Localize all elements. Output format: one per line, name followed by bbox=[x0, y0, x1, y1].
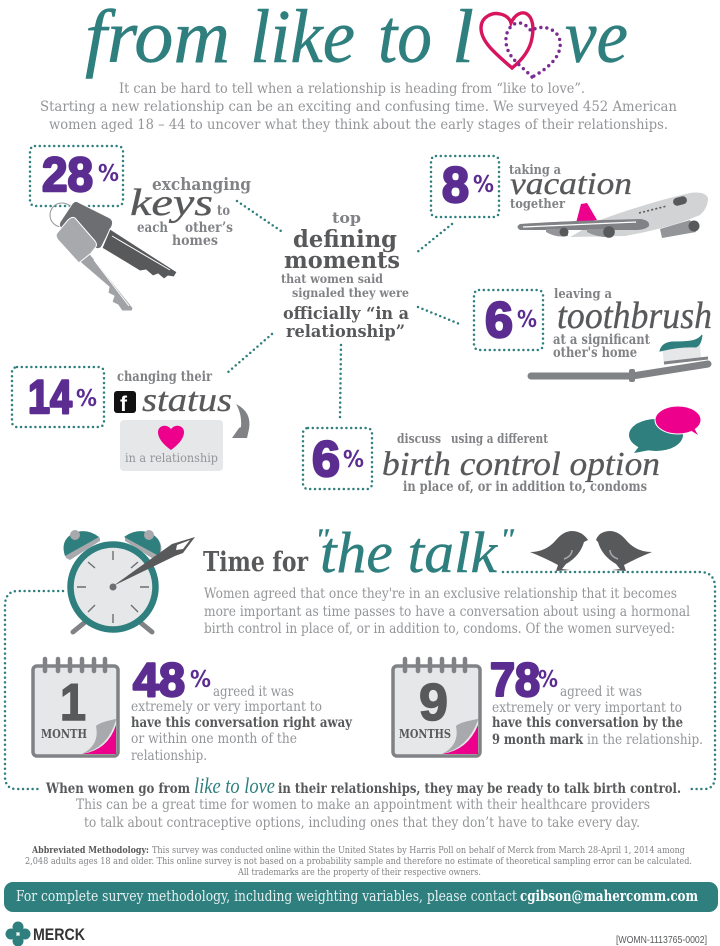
stat: 6 percent toothbrush: at a significant bbox=[553, 332, 651, 348]
stat: 48 percent: extremely or very important to bbox=[131, 699, 322, 715]
icon: calendar 9 months bbox=[393, 659, 480, 756]
icon: keys bbox=[50, 201, 177, 311]
stat: 78 percent: 78 bbox=[490, 653, 540, 706]
heading: time for the talk: Time for bbox=[203, 547, 309, 578]
stat: 78 percent: have this conversation by the bbox=[492, 715, 683, 731]
icon: speech bubbles bbox=[629, 406, 701, 453]
heading: time for the talk: " bbox=[500, 523, 514, 556]
icon: toothbrush bbox=[531, 335, 708, 382]
icon: linked hearts bbox=[481, 13, 560, 77]
icon: facebook: f bbox=[120, 393, 128, 416]
center heading: top defining moments: defining bbox=[293, 226, 397, 253]
stat: 14 percent status: % bbox=[76, 386, 97, 412]
stat: 48 percent: 48 bbox=[133, 653, 185, 706]
methodology note bbox=[25, 845, 692, 878]
stat: 78 percent: % bbox=[538, 667, 558, 693]
methodology note: Abbreviated Methodology: bbox=[31, 845, 149, 856]
title bbox=[85, 0, 628, 79]
closing statement: like to love bbox=[194, 773, 275, 798]
intro text: It can be hard to tell when a relationship is heading from “like to love”. bbox=[119, 81, 585, 97]
icon: calendar 1 month bbox=[33, 659, 118, 756]
stat: 48 percent: % bbox=[190, 667, 211, 693]
stat: 78 percent: 9 month mark bbox=[492, 732, 583, 748]
icon: calendar 1 month: 1 bbox=[60, 674, 86, 732]
closing statement: This can be a great time for women to make an appointment with their healthcare providers bbox=[76, 797, 650, 813]
stat: 28 percent keys: % bbox=[98, 161, 119, 187]
center heading: top defining moments: officially “in a bbox=[283, 304, 409, 324]
icon: airplane bbox=[518, 193, 708, 238]
stat: 28 percent keys: homes bbox=[172, 233, 218, 249]
center heading: top defining moments: signaled they were bbox=[292, 286, 409, 300]
icon: love birds bbox=[530, 531, 652, 571]
relationship status card: in a relationship bbox=[125, 450, 218, 465]
stat: 14 percent status: status bbox=[142, 382, 232, 419]
stat: 28 percent keys: each bbox=[137, 220, 168, 236]
contact band: For complete survey methodology, including weighting variables, please contact bbox=[16, 889, 517, 905]
stat: 48 percent: or within one month of the bbox=[131, 731, 297, 747]
stat: 6 percent birth control bbox=[303, 428, 660, 495]
stat: 78 percent: extremely or very important to bbox=[492, 700, 682, 716]
merck logo: MERCK bbox=[33, 925, 86, 944]
stat: 8 percent vacation: together bbox=[510, 197, 565, 212]
stat: 6 percent birth control: discuss bbox=[397, 432, 441, 447]
icon: calendar 9 months: MONTHS bbox=[399, 727, 451, 741]
stat: 48 percent bbox=[131, 653, 353, 764]
intro text: women aged 18 – 44 to uncover what they think about the early stages of their relationships. bbox=[49, 117, 668, 133]
stat: 6 percent toothbrush: other's home bbox=[553, 345, 637, 361]
connector lines bbox=[227, 201, 462, 418]
stat: 6 percent birth control: % bbox=[343, 447, 364, 473]
stat: 14 percent status: 14 bbox=[28, 370, 72, 423]
stat: 78 percent bbox=[490, 653, 703, 748]
stat: 8 percent vacation: vacation bbox=[510, 165, 632, 201]
icon: curved arrow bbox=[232, 404, 249, 438]
stat: 48 percent: relationship. bbox=[131, 748, 207, 764]
closing statement bbox=[45, 773, 681, 831]
stat: 28 percent keys: 28 bbox=[42, 149, 93, 202]
stat: 6 percent birth control: in place of, or in addition to, condoms bbox=[403, 479, 647, 495]
stat: 8 percent vacation: % bbox=[473, 172, 494, 198]
contact band bbox=[4, 882, 718, 912]
center heading: top defining moments: relationship” bbox=[286, 322, 405, 342]
icon: alarm clock bbox=[64, 530, 195, 632]
heading: time for the talk: " bbox=[315, 523, 329, 556]
stat: 48 percent: agreed it was bbox=[213, 684, 294, 700]
stat: 8 percent vacation: 8 bbox=[442, 157, 469, 213]
stat: 78 percent: in the relationship. bbox=[587, 732, 703, 748]
stat: 14 percent status: changing their bbox=[117, 369, 213, 385]
stat: 28 percent keys: exchanging bbox=[152, 175, 251, 195]
stat: 8 percent vacation bbox=[431, 156, 632, 217]
merck logo bbox=[6, 922, 86, 946]
center heading: top defining moments: moments bbox=[284, 247, 400, 274]
stat: 28 percent keys: other’s bbox=[185, 220, 233, 236]
stat: 8 percent vacation: taking a bbox=[509, 163, 561, 178]
icon: calendar 9 months: 9 bbox=[419, 674, 448, 732]
stat: 6 percent birth control: 6 bbox=[312, 431, 340, 487]
stat: 28 percent keys: to bbox=[217, 203, 230, 219]
methodology note: All trademarks are the property of their respective owners. bbox=[237, 867, 481, 878]
heading: time for the talk: the talk bbox=[320, 520, 498, 585]
heading: time for the talk bbox=[203, 520, 514, 585]
stat: 78 percent: agreed it was bbox=[560, 684, 642, 700]
intro text: Starting a new relationship can be an exciting and confusing time. We surveyed 452 American bbox=[40, 99, 677, 115]
center heading: top defining moments: that women said bbox=[281, 272, 384, 286]
intro text bbox=[40, 81, 677, 133]
stat: 14 percent status bbox=[12, 367, 249, 438]
stat: 6 percent birth control: birth control option bbox=[382, 446, 660, 483]
stat: 28 percent keys: keys bbox=[130, 182, 213, 224]
stat: 6 percent toothbrush: leaving a bbox=[554, 287, 613, 302]
stat: 6 percent toothbrush bbox=[474, 287, 712, 361]
stat: 48 percent: have this conversation right away bbox=[131, 715, 353, 731]
closing statement: When women go from bbox=[45, 781, 190, 797]
talk paragraph bbox=[204, 586, 690, 637]
stat: 28 percent keys bbox=[30, 146, 251, 249]
stat: 6 percent toothbrush: 6 bbox=[485, 292, 513, 348]
stat: 6 percent toothbrush: % bbox=[517, 307, 537, 333]
stat: 6 percent birth control: using a different bbox=[451, 432, 548, 447]
stat: 6 percent toothbrush: toothbrush bbox=[557, 295, 712, 337]
document code: [WOMN-1113765-0002] bbox=[616, 935, 707, 946]
relationship status card bbox=[120, 420, 223, 471]
center heading: top defining moments: top bbox=[332, 209, 361, 227]
closing statement: to talk about contraceptive options, including ones that they don’t have to take every day. bbox=[84, 815, 640, 831]
icon: facebook bbox=[114, 391, 136, 416]
center heading: top defining moments bbox=[281, 209, 409, 342]
section border bbox=[5, 572, 715, 789]
icon: calendar 1 month: MONTH bbox=[41, 727, 87, 741]
